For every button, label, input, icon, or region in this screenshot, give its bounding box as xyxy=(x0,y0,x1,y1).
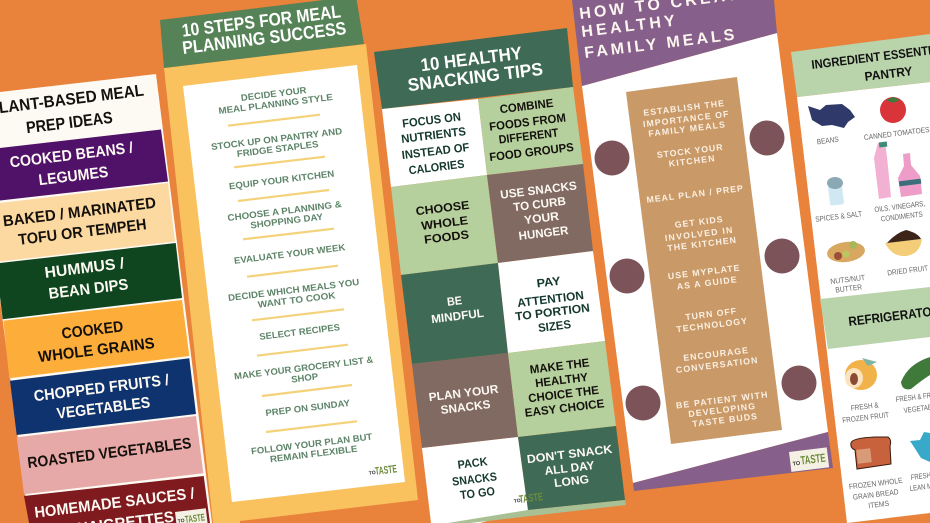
band: cooked beans: LEGUMES xyxy=(38,164,109,189)
header: 10 HEALTHY xyxy=(419,43,523,75)
steps list: SHOP xyxy=(291,371,319,385)
band: chopped fruits xyxy=(10,358,196,435)
logo: TO xyxy=(514,498,521,505)
label: frozen whole grain bread items xyxy=(848,476,903,510)
steps list: EQUIP YOUR KITCHEN xyxy=(228,169,335,191)
tips list: CONVERSATION xyxy=(675,355,758,375)
band: tofu or tempeh: BAKED / MARINATED xyxy=(2,195,157,230)
tip: curb hunger: YOUR xyxy=(523,209,560,227)
tip: portion sizes xyxy=(498,251,605,353)
tip: choose whole foods: WHOLE xyxy=(420,213,469,233)
logo xyxy=(789,447,829,472)
label: spices and salt: SPICES & SALT xyxy=(815,209,863,224)
tip: combine food groups: DIFFERENT xyxy=(498,125,560,147)
header: SNACKING TIPS xyxy=(407,59,544,95)
steps list: REMAIN FLEXIBLE xyxy=(269,444,358,464)
band: cooked beans xyxy=(0,130,168,200)
band: cooked beans: COOKED BEANS / xyxy=(9,139,135,172)
label: frozen whole grain bread items: ITEMS xyxy=(868,499,890,510)
tip: healthy easy choice: EASY CHOICE xyxy=(524,396,605,420)
tip: choose whole foods: CHOOSE xyxy=(415,198,470,218)
icon: fish xyxy=(910,432,930,462)
label: beans: BEANS xyxy=(816,135,839,146)
label: fresh and frozen fruit: FRESH & xyxy=(850,400,879,413)
white list card xyxy=(183,65,405,502)
steps list: FOLLOW YOUR PLAN BUT xyxy=(250,432,373,456)
steps list: PREP ON SUNDAY xyxy=(265,398,350,418)
tips list: ESTABLISH THE xyxy=(643,98,725,118)
tip: plan your snacks xyxy=(412,353,518,448)
band: homemade sauces: HOMEMADE SAUCES / xyxy=(34,485,196,522)
header xyxy=(374,28,573,109)
steps list: MAKE YOUR GROCERY LIST & xyxy=(234,354,374,382)
header xyxy=(791,34,930,97)
tip: healthy easy choice xyxy=(508,341,616,437)
icon: zucchini xyxy=(901,357,930,389)
band: hummus: BEAN DIPS xyxy=(48,276,129,303)
steps list: DECIDE WHICH MEALS YOU xyxy=(228,277,360,303)
header: FAMILY MEALS xyxy=(583,27,736,62)
logo: TO xyxy=(369,470,376,477)
logo: TASTE xyxy=(374,463,398,478)
tip: be mindful xyxy=(401,263,508,364)
tip: choose whole foods xyxy=(391,175,498,275)
tip: don't snack all day: ALL DAY xyxy=(544,458,595,478)
heading: plant-based meal prep ideas: PREP IDEAS xyxy=(25,109,114,137)
tip: focus on nutrients xyxy=(382,99,487,187)
tips list: DEVELOPING xyxy=(688,401,756,419)
heading: plant-based meal prep ideas xyxy=(0,82,145,137)
white body xyxy=(797,82,930,523)
label: fresh and frozen fruit: FROZEN FRUIT xyxy=(842,410,890,425)
band: whole grains xyxy=(3,300,189,378)
label: fresh and frozen vegetables xyxy=(895,389,930,415)
steps list: SELECT RECIPES xyxy=(259,322,340,342)
tips list: INVOLVED IN xyxy=(664,225,733,243)
icon: peach xyxy=(845,358,877,390)
tip: healthy easy choice: CHOICE THE xyxy=(527,383,600,405)
logo: TASTE xyxy=(800,451,826,468)
footer xyxy=(633,432,833,491)
tip: curb hunger xyxy=(487,164,593,263)
header: PANTRY xyxy=(864,64,914,84)
steps list: CHOOSE A PLANNING & xyxy=(227,199,343,223)
tip: portion sizes: SIZES xyxy=(537,317,572,335)
tip: portion sizes: ATTENTION xyxy=(516,288,585,310)
header: PLANNING SUCCESS xyxy=(181,18,347,58)
steps list: FRIDGE STAPLES xyxy=(236,139,319,159)
band: whole grains: COOKED xyxy=(61,318,124,343)
tip: don't snack all day: LONG xyxy=(553,472,590,490)
tip: combine food groups xyxy=(478,87,583,175)
tip: healthy easy choice: HEALTHY xyxy=(534,370,589,390)
band: chopped fruits: CHOPPED FRUITS / xyxy=(33,372,171,405)
tip: pack snacks: SNACKS xyxy=(451,469,498,489)
header: HEALTHY xyxy=(580,13,676,41)
tip: healthy easy choice: MAKE THE xyxy=(529,355,590,377)
steps list: EVALUATE YOUR WEEK xyxy=(233,242,346,266)
label: frozen whole grain bread items: FROZEN WHOLE xyxy=(848,476,903,491)
band: refrigerator xyxy=(820,287,930,349)
icon: beans xyxy=(808,104,855,128)
tips list: ENCOURAGE xyxy=(683,345,749,363)
tip: don't snack all day xyxy=(518,426,625,510)
tips list: TURN OFF xyxy=(685,306,737,322)
steps list: WANT TO COOK xyxy=(257,290,336,310)
tip: curb hunger: USE SNACKS xyxy=(499,178,578,202)
band: tofu or tempeh xyxy=(0,183,175,262)
icon: tomato xyxy=(880,97,906,123)
steps list xyxy=(211,85,374,464)
tip: plan your snacks: PLAN YOUR xyxy=(428,382,500,404)
label: nuts / nut butter: BUTTER xyxy=(835,282,863,295)
tips list: GET KIDS xyxy=(674,214,723,230)
tip: plan your snacks: SNACKS xyxy=(440,397,491,417)
panel: plant-based meal prep ideas xyxy=(0,74,212,523)
logo: TO xyxy=(792,461,801,468)
tips list: IMPORTANCE OF xyxy=(642,109,730,129)
tips list: BE PATIENT WITH xyxy=(675,389,768,411)
tips list: STOCK YOUR xyxy=(656,142,724,160)
tip: focus on nutrients: CALORIES xyxy=(408,157,465,177)
tip: pack snacks: PACK xyxy=(457,454,489,472)
icon: bottles xyxy=(874,142,922,199)
tip: don't snack all day: DON'T SNACK xyxy=(526,442,614,466)
tip: combine food groups: FOODS FROM xyxy=(488,110,567,134)
logo: TASTE xyxy=(518,491,544,506)
band: tofu or tempeh: TOFU OR TEMPEH xyxy=(17,216,148,249)
tip: focus on nutrients: FOCUS ON xyxy=(401,109,462,131)
label: nuts / nut butter: NUTS/NUT xyxy=(830,273,866,286)
band: hummus: HUMMUS / xyxy=(44,255,126,282)
tips list: USE MYPLATE xyxy=(667,263,740,281)
band: whole grains: WHOLE GRAINS xyxy=(37,335,156,366)
tip: be mindful: BE xyxy=(446,293,463,309)
tips list: TECHNOLOGY xyxy=(676,316,748,334)
tips list: KITCHEN xyxy=(668,153,715,169)
tip: pack snacks xyxy=(422,437,528,523)
icon: nuts xyxy=(826,240,866,264)
tips list: MEAL PLAN / PREP xyxy=(646,183,744,205)
icon: spice shaker xyxy=(827,177,844,206)
panel: 10 steps for meal planning success xyxy=(160,0,418,523)
tip: pack snacks: TO GO xyxy=(459,484,496,502)
tip: focus on nutrients: INSTEAD OF xyxy=(401,140,470,162)
tan list column xyxy=(626,77,782,444)
steps list: MEAL PLANNING STYLE xyxy=(218,92,333,116)
steps list: DECIDE YOUR xyxy=(240,85,307,103)
header xyxy=(160,0,364,68)
tip: curb hunger: TO CURB xyxy=(512,194,567,214)
band: roasted vegetables: ROASTED VEGETABLES xyxy=(27,435,192,472)
label: fresh and frozen fruit xyxy=(842,400,890,425)
white body xyxy=(582,33,828,483)
tip: combine food groups: FOOD GROUPS xyxy=(488,140,575,164)
yellow backing xyxy=(164,44,418,523)
logo xyxy=(513,491,544,507)
tip: portion sizes: PAY xyxy=(536,274,561,290)
tips list xyxy=(642,98,768,429)
panel: how to create healthy family meals xyxy=(572,0,833,491)
icon: bread xyxy=(851,437,891,469)
logo xyxy=(368,463,398,479)
band: chopped fruits: VEGETABLES xyxy=(56,394,151,423)
label: frozen whole grain bread items: GRAIN BREAD xyxy=(852,487,900,502)
icon: dried fruit bowl xyxy=(885,230,922,256)
panel: 10 healthy snacking tips xyxy=(374,28,626,523)
tips list: FAMILY MEALS xyxy=(648,119,726,139)
steps list: STOCK UP ON PANTRY AND xyxy=(211,126,343,152)
tip: curb hunger: HUNGER xyxy=(518,223,570,243)
label: fresh lean meats xyxy=(909,470,930,493)
tip: choose whole foods: FOODS xyxy=(423,227,470,247)
tips list: THE KITCHEN xyxy=(667,235,736,253)
label: oils, vinegars, condiments xyxy=(874,199,926,224)
tip: combine food groups: COMBINE xyxy=(499,96,554,116)
tips list: TASTE BUDS xyxy=(692,411,758,429)
logo xyxy=(175,508,208,523)
tips list: AS A GUIDE xyxy=(676,274,737,292)
header xyxy=(572,0,777,86)
label: nuts / nut butter xyxy=(830,273,866,295)
bottom strip xyxy=(448,500,626,523)
steps list: SHOPPING DAY xyxy=(250,212,323,230)
decorative circles xyxy=(594,120,816,420)
tip: be mindful: MINDFUL xyxy=(430,306,485,326)
tip: portion sizes: TO PORTION xyxy=(514,301,591,324)
tip: focus on nutrients: NUTRIENTS xyxy=(400,124,467,146)
band: roasted vegetables xyxy=(17,416,203,494)
band: hummus xyxy=(0,243,182,319)
panel: ingredient essentials xyxy=(791,34,930,523)
